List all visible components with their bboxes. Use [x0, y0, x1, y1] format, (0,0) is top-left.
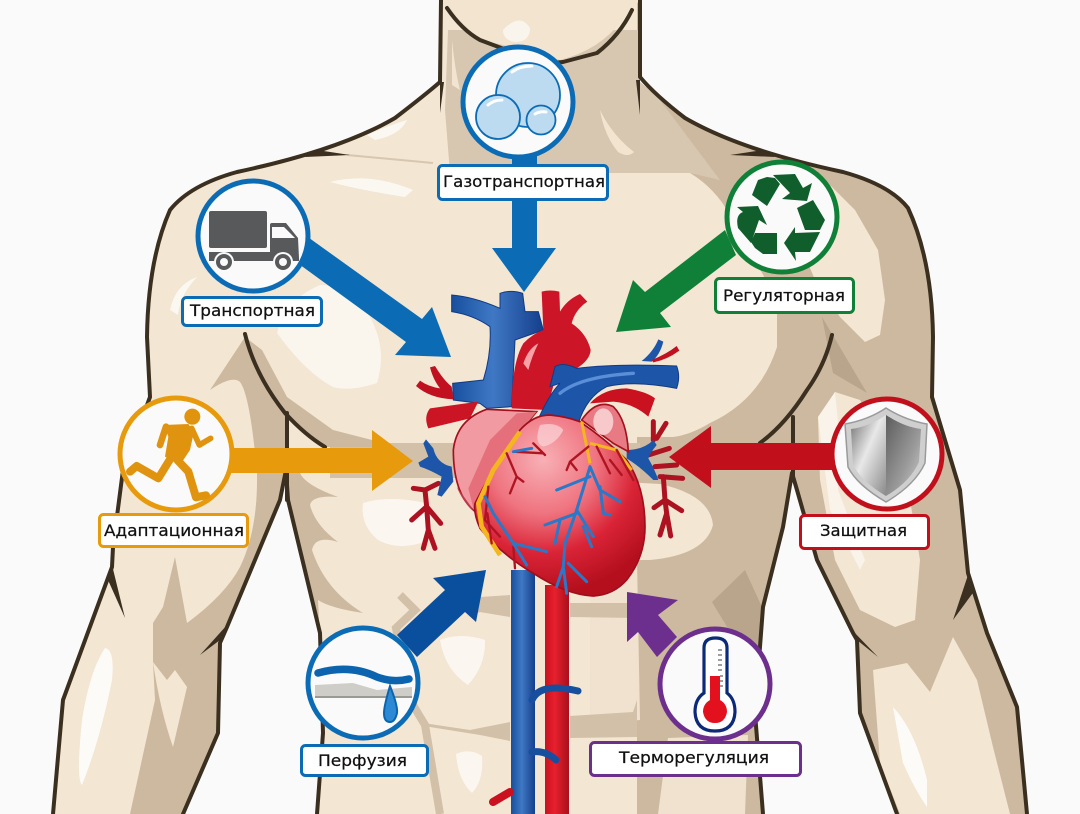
label: thermoregulation: [590, 742, 800, 776]
blue pulmonary veins: [418, 439, 658, 497]
icon: tissue layer: [315, 683, 412, 697]
arrow: adaptation: [225, 430, 413, 491]
label: perfusion: Перфузия: [318, 751, 407, 770]
vein side branches: [532, 688, 578, 760]
badge: transport: [198, 181, 308, 291]
left forearm cream patch: [153, 662, 187, 747]
right forearm highlight: [893, 707, 927, 807]
darker wedge at right armpit: [822, 317, 867, 393]
circle: [120, 398, 232, 510]
neck shade: [445, 30, 720, 180]
arrow: thermoregulation: [627, 592, 678, 657]
icon: drop: [384, 686, 397, 722]
side vein red branches: [412, 422, 683, 548]
pulmonary artery: [539, 365, 679, 423]
right lower cream: [637, 565, 748, 814]
arrow: regulatory: [616, 230, 736, 332]
left armpit and inner arm shade: [130, 337, 290, 814]
left atrium lobe: [453, 409, 537, 511]
under-pectoral band: [330, 443, 640, 478]
thin collar line: [347, 155, 433, 163]
coronary fat lines: [478, 432, 520, 555]
arrow: perfusion: [397, 570, 486, 657]
left forearm highlight: [79, 648, 113, 785]
circle: [660, 629, 770, 739]
artery stub: [493, 792, 510, 802]
right pectoral cream: [637, 173, 777, 437]
left shoulder highlights: [170, 120, 413, 315]
circle: [727, 162, 837, 272]
icon: ticks: [718, 650, 723, 686]
label: gas transport: Газотранспортная: [443, 172, 605, 191]
badge: adaptation: [120, 398, 232, 510]
right deltoid cream: [810, 184, 885, 342]
icon: shield rim: [845, 408, 927, 502]
small red branches: [485, 443, 633, 568]
icon: bubbles: [476, 63, 560, 139]
abdomen shade bands: [423, 595, 637, 741]
abdomen white patches: [363, 499, 485, 793]
label: protective: Защитная: [820, 521, 907, 540]
icon: truck: [209, 211, 299, 272]
chin highlight: [503, 20, 530, 42]
icon: tissue bottom edge: [315, 696, 412, 698]
icon: shield left half: [851, 415, 886, 496]
badge: protective: [832, 399, 942, 509]
right atrium lobe: [582, 404, 628, 452]
lower vessels: vena cava and aorta: [493, 570, 578, 814]
coronary fat right: [582, 422, 632, 470]
abdomen vertical shade: [396, 595, 440, 814]
top right blue branch: [642, 339, 663, 362]
vein column: [511, 570, 535, 814]
ventricles: [475, 415, 645, 596]
right abdominal patch: [639, 482, 713, 560]
left torso shade: [289, 473, 363, 620]
label: adaptation: [100, 514, 248, 546]
right upper arm highlight: [818, 392, 865, 570]
label: transport: [182, 298, 322, 326]
under left pectoral shade: [245, 337, 372, 447]
heart gloss: [537, 424, 563, 447]
arrow: gas transport: [492, 155, 556, 292]
pulmonary highlight: [560, 373, 633, 393]
coronary blue branches: [485, 448, 620, 593]
left atrium fold: [468, 412, 537, 511]
arrow: protective: [669, 426, 835, 488]
circle: [198, 181, 308, 291]
icon: thermometer body: [695, 638, 735, 731]
label: protective: [800, 516, 928, 548]
right forearm cream: [873, 637, 1010, 814]
heart with great vessels: [412, 290, 683, 596]
badge: perfusion: [308, 628, 418, 738]
left atrium lower shade: [457, 487, 474, 511]
arrow: transport: [292, 235, 451, 357]
top right red branch: [652, 346, 679, 362]
aorta: [512, 290, 591, 410]
label: transport: Транспортная: [189, 301, 315, 320]
right red pulmonary vessel: [590, 388, 655, 417]
right flank dark spike: [712, 570, 762, 646]
badge: regulatory: [727, 162, 837, 272]
left pectoral white patch: [277, 285, 381, 389]
label: adaptation: Адаптационная: [104, 521, 244, 540]
neck highlights: [452, 40, 634, 155]
badge: thermoregulation: [660, 629, 770, 739]
upper vena cava: [452, 291, 543, 408]
circle: [308, 628, 418, 738]
badge: gas transport: [463, 47, 573, 157]
face and chin: [469, 0, 638, 60]
icon: runner: [130, 409, 211, 497]
outline tails: [108, 80, 975, 657]
icon: mercury: [703, 676, 727, 723]
label: regulatory: [716, 278, 854, 312]
label: thermoregulation: Терморегуляция: [618, 748, 769, 767]
left red tube: [426, 402, 478, 428]
icon: vessel band: [318, 669, 409, 681]
icon: shield right half: [886, 415, 921, 496]
icon: recycle: [737, 174, 825, 261]
circle: [832, 399, 942, 509]
label: gas transport: [438, 166, 608, 200]
aorta highlight: [523, 343, 538, 370]
right upper arm cream: [818, 392, 920, 627]
artery column: [545, 585, 569, 814]
circle: [463, 47, 573, 157]
right side shade: [637, 2, 1025, 814]
right lobe highlight: [593, 408, 613, 435]
left red branch: [416, 366, 453, 399]
label: regulatory: Регуляторная: [723, 286, 845, 305]
label: perfusion: [302, 746, 428, 776]
